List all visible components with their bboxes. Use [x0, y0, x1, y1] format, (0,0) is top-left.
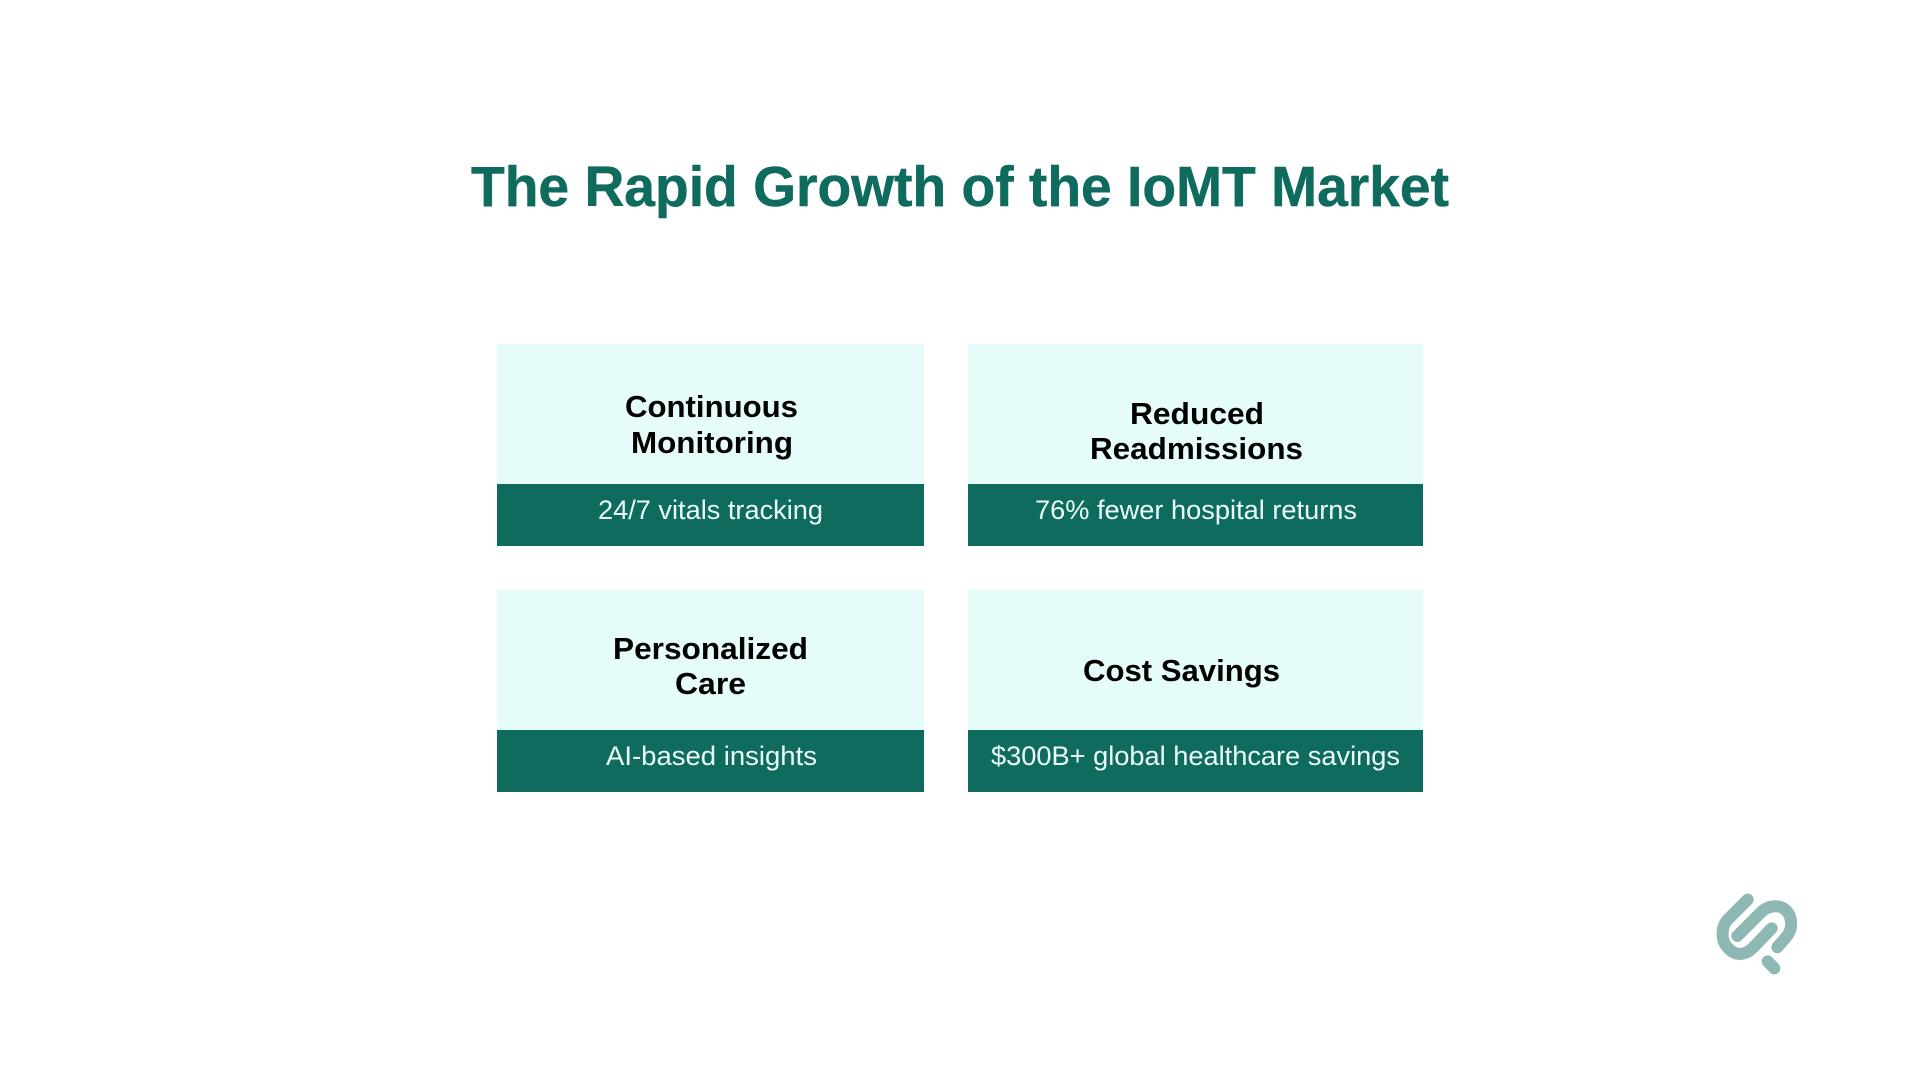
panel: continuous monitoring [497, 344, 924, 546]
heading: personalized care: Care [675, 666, 746, 701]
heading: personalized care [613, 631, 808, 701]
heading: continuous monitoring: Monitoring [631, 425, 793, 460]
heading: reduced readmissions: Reduced [1130, 396, 1264, 431]
heading: reduced readmissions: Readmissions [1090, 431, 1303, 466]
heading: continuous monitoring: Continuous [625, 389, 798, 424]
panel: reduced readmissions [968, 344, 1423, 546]
panel: personalized care [497, 590, 924, 792]
heading: reduced readmissions [1090, 396, 1303, 466]
heading: cost savings: Cost Savings [1083, 653, 1280, 688]
text: ai-based insights: AI-based insights [606, 741, 817, 771]
icon: logo [1723, 900, 1791, 968]
heading: continuous monitoring [625, 389, 798, 460]
heading: personalized care: Personalized [613, 631, 808, 666]
title: The Rapid Growth of the IoMT Market [471, 155, 1449, 219]
text: fewer hospital returns: 76% fewer hospital returns [1035, 495, 1357, 525]
text: global healthcare savings: $300B+ global healthcare savings [991, 741, 1400, 771]
panel: cost savings [968, 590, 1423, 792]
text: vitals tracking: 24/7 vitals tracking [598, 495, 823, 525]
